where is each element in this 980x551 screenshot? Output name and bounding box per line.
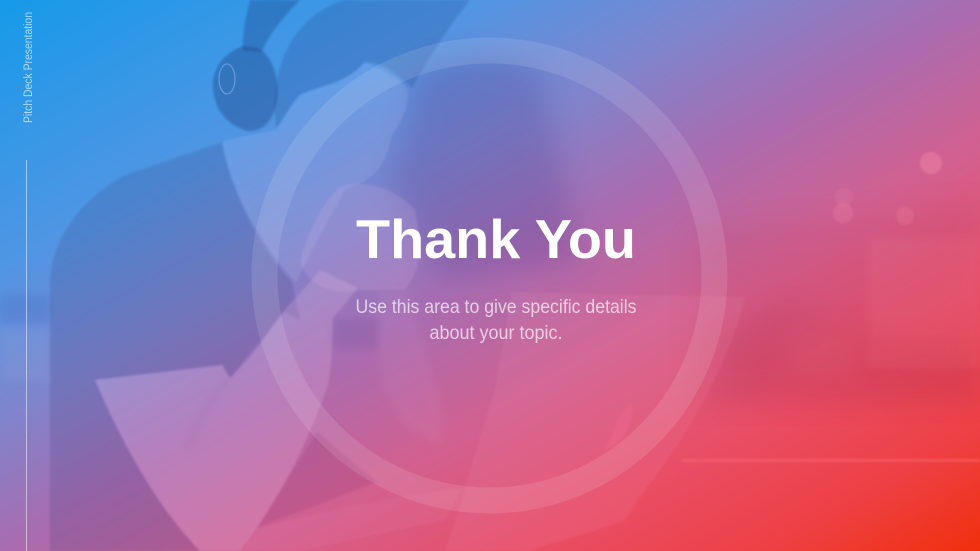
subtitle: Use this area to give specific details [356,296,637,318]
headphones [213,0,300,131]
main arm and sleeve [95,270,358,551]
person: man with headphones [50,0,745,551]
shirt [50,142,300,551]
face and neck [222,62,408,282]
laptop [240,292,745,551]
decorative ring [264,50,714,500]
side label: Pitch Deck Presentation: Pitch Deck Presentation [23,12,35,123]
hands [300,184,419,292]
shadow under arm [257,432,377,528]
subtitle: about your topic. [430,322,562,344]
other forearm [378,290,445,445]
dark shirt between arms [333,318,378,348]
arm crease [187,378,230,448]
hair [275,0,470,128]
subtitle [356,296,637,344]
dark area behind head [390,56,580,280]
background photo: blurred office scene [0,152,980,462]
side vertical line [26,160,27,551]
title: Thank You [356,209,636,270]
